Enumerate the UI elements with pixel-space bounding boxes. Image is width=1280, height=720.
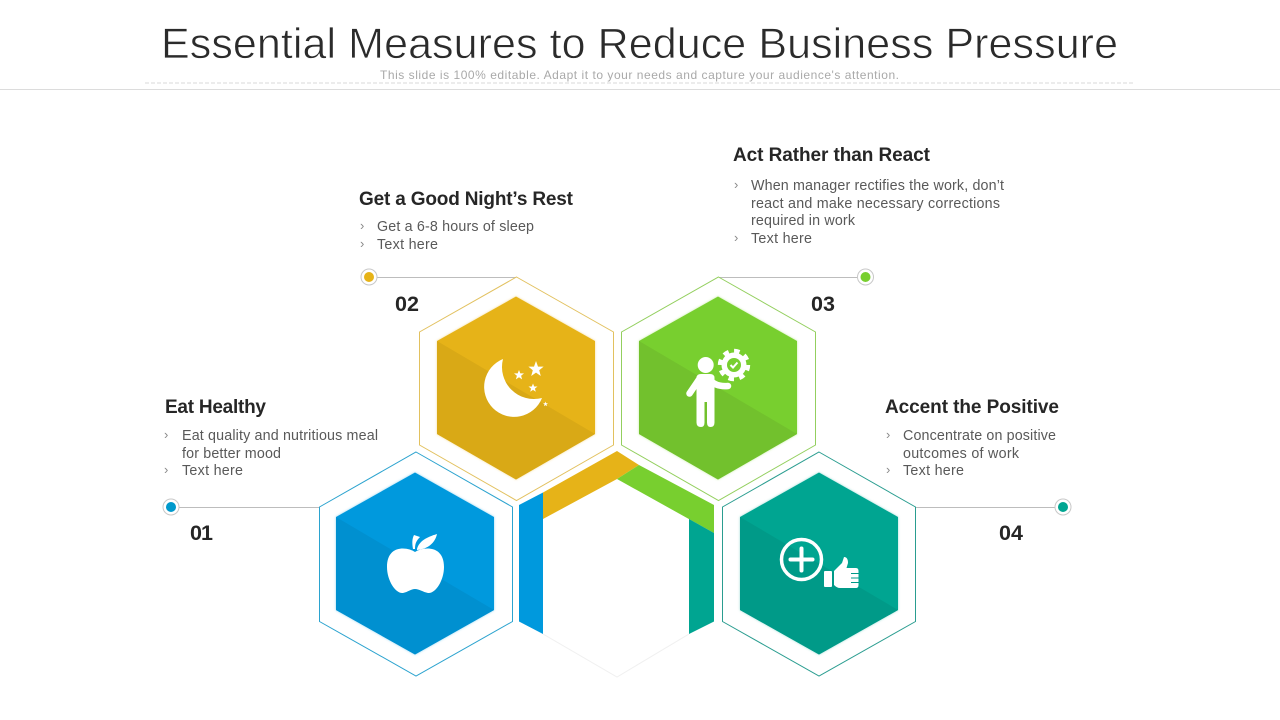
text block: React bullets: [734, 177, 1004, 247]
text block: Positive bullets: ›: [886, 427, 890, 442]
panel: 03 Act Rather than React: [622, 145, 1004, 500]
hexagon 02: [420, 277, 614, 500]
text block: Positive bullets: outcomes of work: [903, 446, 1020, 462]
hexagon 03: [622, 277, 816, 500]
icon: plus and thumbs up: [782, 540, 859, 588]
heading: Get a Good Night's Rest: Get a Good Night’s Rest: [359, 189, 574, 210]
text block: Eat Healthy bullets: Text here: [182, 463, 243, 479]
heading: Accent the Positive: Accent the Positive: [885, 397, 1059, 418]
text block: Rest bullets: Get a 6-8 hours of sleep: [377, 219, 534, 235]
panel: 01 Eat Healthy: [163, 397, 512, 676]
connector 04: [916, 499, 1071, 515]
text block: React bullets: required in work: [751, 213, 856, 229]
icon: apple: [387, 534, 444, 593]
text block: Rest bullets: [360, 218, 534, 253]
text block: Eat Healthy bullets: Eat quality and nutritious meal: [182, 428, 378, 444]
central hexagon: [519, 451, 714, 677]
text block: Rest bullets: ›: [360, 218, 364, 233]
heading: Act Rather than React: Act Rather than React: [733, 145, 931, 166]
connector 01: [163, 499, 320, 515]
text block: Positive bullets: Concentrate on positive: [903, 428, 1056, 444]
text block: React bullets: Text here: [751, 231, 812, 247]
hexagon 01: [320, 452, 512, 676]
icon: moon and stars: [484, 359, 548, 417]
text block: Positive bullets: ›: [886, 462, 890, 477]
text block: Positive bullets: [886, 427, 1056, 479]
hexagon 04: [722, 452, 916, 676]
panel: 02 Get a Good Night's Rest: [359, 189, 614, 500]
text block: Positive bullets: Text here: [903, 463, 964, 479]
subtitle: This slide is 100% editable. Adapt it to your needs and capture your audience's attention.: [380, 68, 899, 82]
text block: Eat Healthy bullets: [164, 427, 378, 479]
icon: person with gear: [690, 351, 748, 427]
heading: Eat Healthy: Eat Healthy: [165, 397, 266, 418]
text block: Rest bullets: ›: [360, 236, 364, 251]
number 02: 02: [395, 292, 419, 316]
panel: 04 Accent the Positive: [722, 397, 1071, 676]
text block: React bullets: ›: [734, 177, 738, 192]
text block: Eat Healthy bullets: ›: [164, 462, 168, 477]
connector 02: [361, 269, 516, 285]
text block: Eat Healthy bullets: for better mood: [182, 446, 281, 462]
title: Essential Measures to Reduce Business Pressure: [161, 20, 1118, 68]
text block: Rest bullets: Text here: [377, 237, 438, 253]
number 04: 04: [999, 521, 1023, 545]
number 01: 01: [190, 521, 213, 545]
connector 03: [718, 269, 874, 285]
number 03: 03: [811, 292, 835, 316]
text block: Eat Healthy bullets: ›: [164, 427, 168, 442]
text block: React bullets: react and make necessary corrections: [751, 196, 1000, 212]
text block: React bullets: When manager rectifies the work, don’t: [751, 178, 1004, 194]
text block: React bullets: ›: [734, 230, 738, 245]
